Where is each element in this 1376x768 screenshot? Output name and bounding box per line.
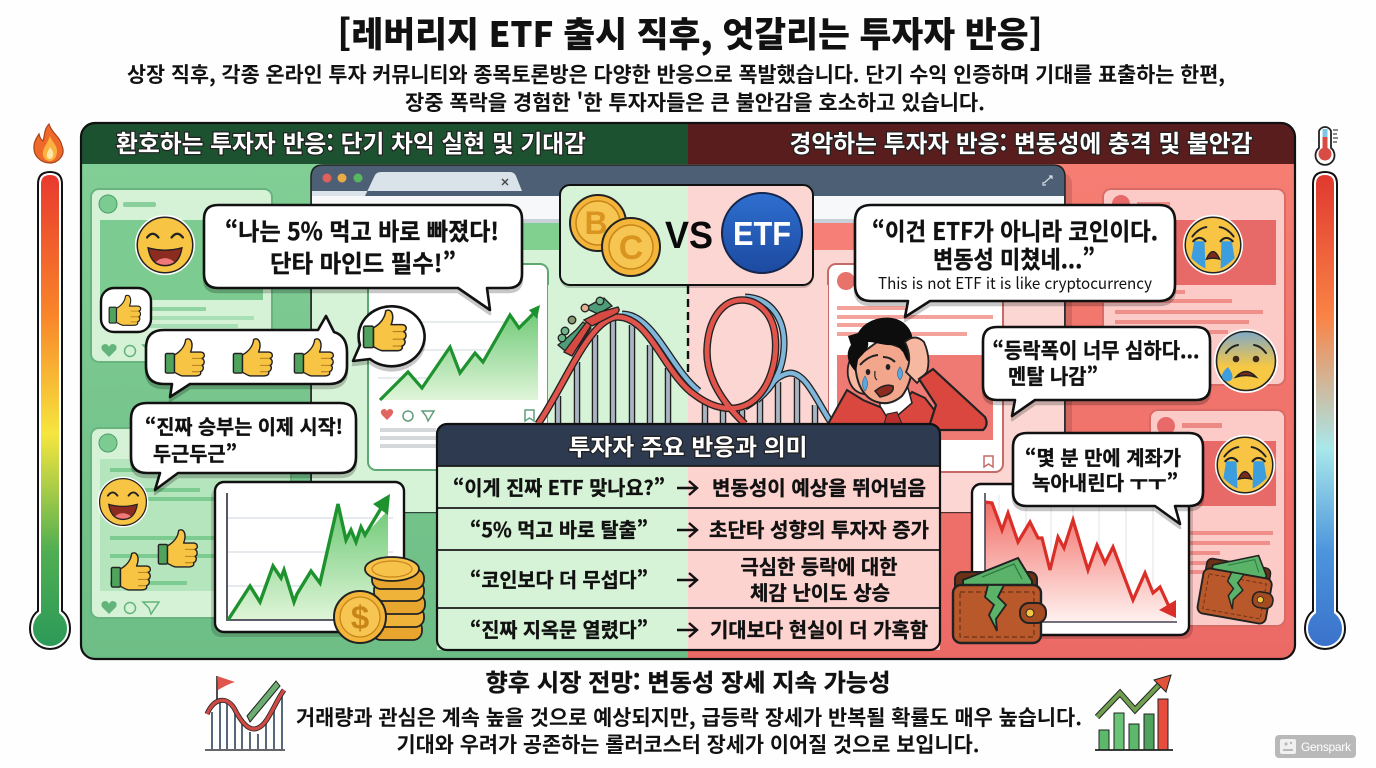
box right [688, 185, 813, 285]
icon: thermometer [1316, 127, 1338, 165]
watermark: Genspark [1275, 735, 1356, 758]
row 2: 초단타 성향의 투자자 증가 [709, 514, 929, 543]
icon: fearful face [1214, 329, 1278, 393]
chart shadow [211, 487, 404, 637]
table header [437, 424, 940, 466]
card: right top post [1103, 189, 1285, 385]
bubble: quote 5 percent [204, 205, 522, 310]
browser shadow [318, 172, 1072, 514]
VS box [560, 185, 813, 288]
icon: torn wallet small [1197, 547, 1280, 625]
row 1 [453, 472, 926, 501]
row 2 [470, 514, 929, 543]
icon: fire [34, 124, 63, 163]
chart: rising line [211, 482, 404, 637]
bubble: not ETF but coin: This is not ETF it is like cryptocurrency [878, 270, 1153, 294]
browser frame [311, 165, 1065, 512]
outlook text: 기대와 우려가 공존하는 롤러코스터 장세가 이어질 것으로 보입니다. [396, 729, 980, 759]
box shadow [560, 188, 813, 288]
bubble: quote 5 percent: 단타 마인드 필수!” [270, 244, 456, 279]
blue rails [622, 297, 832, 424]
supports [558, 318, 815, 424]
icon: laughing face small [98, 477, 148, 527]
row 4: “진짜 지옥문 열렸다” [470, 614, 648, 643]
bubble: swings too big: “등락폭이 너무 심하다... [992, 335, 1200, 365]
header: green [81, 123, 688, 164]
browser body right [688, 196, 1064, 512]
chart shadow [972, 489, 1193, 639]
row 3: 체감 난이도 상승 [750, 577, 890, 606]
icon: coin stack: $ [351, 599, 369, 636]
right arm [919, 369, 987, 430]
centre background band left [548, 285, 688, 425]
icon: coin C: C [619, 229, 643, 267]
coaster train [558, 297, 619, 356]
VS text: VS [665, 215, 713, 257]
banner left [312, 223, 688, 250]
bubble: quote game begins: “진짜 승부는 이제 시작! [145, 411, 343, 440]
watermark: Genspark: Genspark [1301, 740, 1352, 754]
table body right [688, 466, 940, 650]
bubble: thumb circle [353, 306, 425, 366]
mouth [875, 385, 893, 397]
intro text: 장중 폭락을 경험한 '한 투자자들은 큰 불안감을 호소하고 있습니다. [405, 87, 985, 117]
main panel [81, 123, 1295, 659]
bubble: swings too big: 멘탈 나감” [1008, 361, 1098, 391]
row 4: 기대보다 현실이 더 가혹함 [710, 614, 928, 643]
address bar [312, 196, 1064, 222]
bubble: not ETF but coin: 변동성 미쳤네...” [933, 240, 1095, 275]
icon: bitcoin coin: B [584, 205, 608, 241]
icon: crying face lower [1215, 435, 1275, 495]
icon: crying face [1183, 215, 1243, 275]
bubble: not ETF but coin: “이건 ETF가 아니라 코인이다. [872, 212, 1158, 247]
table: reactions and meaning [437, 424, 940, 650]
icon: thumb badge [101, 288, 151, 332]
intro text [127, 59, 1225, 117]
rollercoaster [538, 297, 832, 424]
heading: optimistic: 환호하는 투자자 반응: 단기 차익 실현 및 기대감 [116, 124, 586, 159]
icon: torn wallet large [953, 558, 1046, 643]
face [855, 340, 913, 403]
bubble: quote 5 percent: “나는 5% 먹고 바로 빠졌다! [225, 212, 499, 247]
hair [848, 318, 913, 372]
tab [312, 172, 522, 196]
expand icon [1043, 176, 1052, 185]
outlook heading: 향후 시장 전망: 변동성 장세 지속 가능성 [486, 663, 890, 698]
bubble: account melting: 녹아내린다 ㅜㅜ” [1032, 467, 1178, 496]
outlook text: 거래량과 관심은 계속 높을 것으로 예상되지만, 급등락 장세가 반복될 확률도 매우 높습니다. [296, 702, 1082, 732]
browser body left [312, 196, 688, 512]
row 2: “5% 먹고 바로 탈출” [470, 514, 648, 543]
icon: coin C [602, 218, 660, 276]
header: red [688, 123, 1295, 164]
man worried [828, 318, 987, 430]
card: centre right post [828, 264, 1003, 472]
window buttons [322, 174, 362, 182]
icon: coin stack [334, 557, 425, 643]
row 3 [470, 551, 898, 606]
icon: mini rollercoaster [205, 676, 285, 750]
panel: optimistic background [81, 123, 688, 659]
bubble: swings too big [983, 327, 1210, 416]
chart: falling line [972, 484, 1193, 639]
heading: worried: 경악하는 투자자 반응: 변동성에 충격 및 불안감 [790, 124, 1252, 159]
icon: ETF badge [722, 193, 802, 273]
right cold gauge [1305, 172, 1345, 649]
tab close [502, 179, 508, 185]
outlook text [296, 702, 1082, 759]
title: [레버리지 ETF 출시 직후, 엇갈리는 투자자 반응] [338, 7, 1042, 58]
icon: thumb small left [111, 553, 150, 590]
row 3: “코인보다 더 무섭다” [470, 564, 648, 593]
eyes and brows [860, 355, 895, 365]
browser window [311, 165, 1072, 514]
icon: bitcoin coin [570, 195, 626, 251]
bubble: quote game begins: 두근두근” [153, 438, 237, 467]
intro text: 상장 직후, 각종 온라인 투자 커뮤니티와 종목토론방은 다양한 반응으로 폭발했습니다. 단기 수익 인증하며 기대를 표출하는 한편, [127, 59, 1225, 89]
bubble: account melting [1013, 433, 1203, 524]
bubble: not ETF but coin [855, 205, 1175, 317]
card: left top post [91, 189, 272, 362]
banner right [688, 223, 1064, 250]
panel outline [81, 123, 1295, 659]
row 4 [470, 614, 928, 643]
divider dashed line [687, 286, 689, 385]
red rail [538, 300, 776, 424]
bubble: account melting: “몇 분 만에 계좌가 [1025, 442, 1181, 471]
box left [560, 185, 688, 285]
chart card [215, 482, 404, 632]
panel: worried background [688, 123, 1295, 659]
table body left [437, 466, 688, 650]
icon: thumb small right [158, 530, 197, 567]
tears [862, 367, 902, 391]
icon: mini bar chart with arrow [1095, 675, 1173, 750]
card: right bottom post [1150, 410, 1285, 626]
right hand [905, 338, 928, 383]
shirt and tie [880, 388, 912, 422]
icon: ETF badge: ETF [733, 215, 791, 252]
left hand [848, 352, 868, 394]
left heat gauge [30, 172, 70, 649]
row 1: “이게 진짜 ETF 맞나요?” [453, 472, 665, 501]
icon: laughing face [135, 215, 195, 275]
jacket [828, 390, 945, 424]
table heading: 투자자 주요 반응과 의미 [568, 428, 808, 462]
bubble: thumbs row [146, 316, 347, 397]
centre background band right [688, 285, 828, 425]
card: left bottom post [91, 428, 291, 618]
bubble: quote game begins [131, 403, 356, 490]
row 1: 변동성이 예상을 뛰어넘음 [712, 472, 926, 501]
card: centre left chart post [368, 264, 548, 470]
row 3: 극심한 등락에 대한 [740, 551, 898, 580]
chart card [972, 484, 1189, 635]
